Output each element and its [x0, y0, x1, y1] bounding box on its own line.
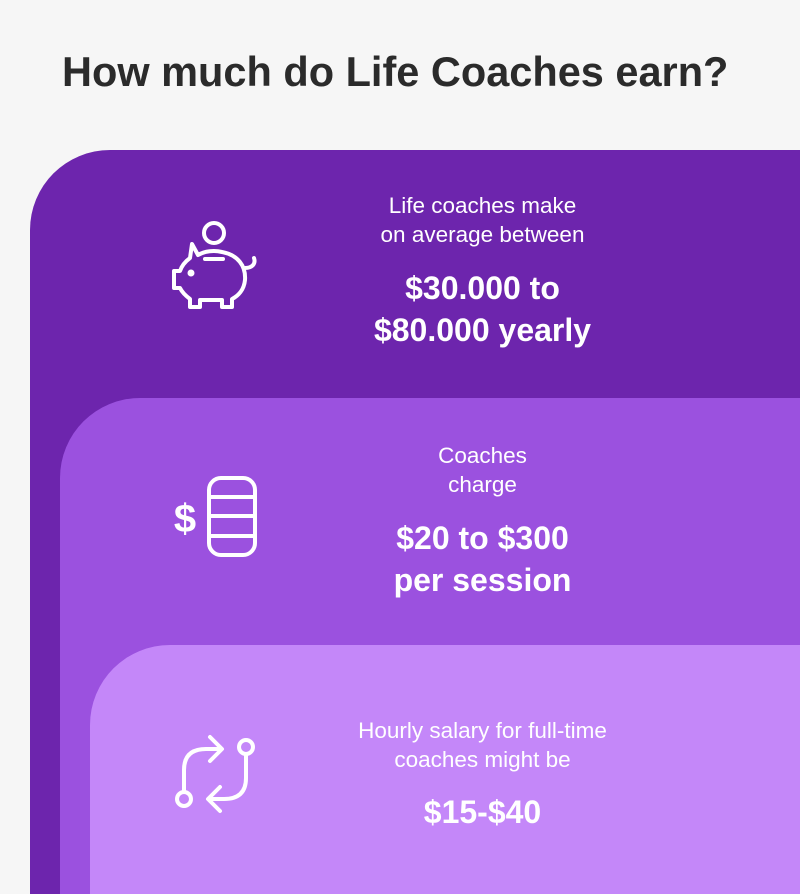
text: yearly figure: $30.000 to	[405, 270, 560, 306]
text: session figure	[394, 520, 571, 598]
text: hourly intro	[358, 718, 607, 772]
text: yearly figure	[374, 270, 591, 348]
text: yearly intro: on average between	[381, 222, 584, 247]
text: session intro	[438, 443, 527, 497]
text: yearly intro	[381, 193, 584, 247]
icon: coins: $	[174, 497, 196, 541]
text: hourly figure: $15-$40	[424, 794, 541, 830]
text: yearly figure: $80.000 yearly	[374, 312, 591, 348]
title: How much do Life Coaches earn?	[62, 48, 728, 95]
text: session intro: Coaches	[438, 443, 527, 468]
panel: session	[60, 398, 800, 894]
text: yearly intro: Life coaches make	[389, 193, 576, 218]
text: hourly intro: Hourly salary for full-time	[358, 718, 607, 743]
text: session figure: per session	[394, 562, 571, 598]
text: session figure: $20 to $300	[396, 520, 569, 556]
text: hourly intro: coaches might be	[394, 747, 571, 772]
text: session intro: charge	[448, 472, 517, 497]
panel: hourly	[90, 645, 800, 894]
